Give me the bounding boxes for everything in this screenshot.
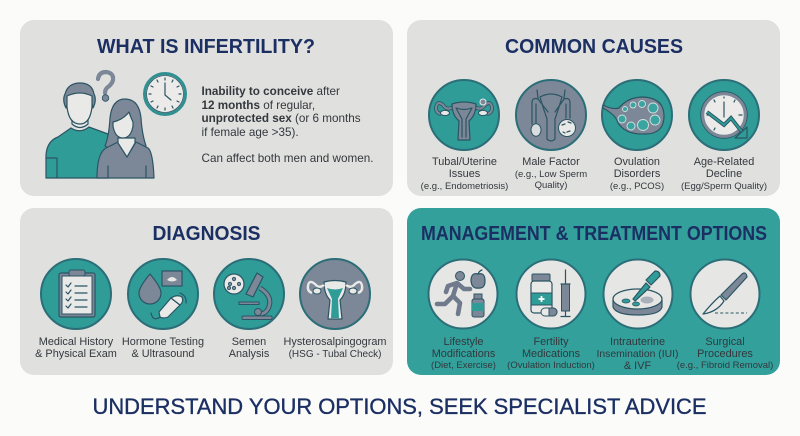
label: age-related decline: (Egg/Sperm Quality) [681,181,767,192]
text: who it affects: Can affect both men and women. [202,152,373,165]
label: hormone testing: & Ultrasound [132,348,194,360]
icon: clock with declining arrow [689,80,759,150]
label: IUI and IVF: & IVF [624,360,651,372]
panel: diagnosis [20,208,393,375]
label: IUI and IVF: Intrauterine [610,336,665,348]
panel: management and treatment options [407,208,780,375]
label: fertility medications: Fertility [533,336,569,348]
label: surgical procedures: (e.g., Fibroid Removal) [677,360,773,371]
icon: couple with question mark [46,72,154,178]
label: age-related decline: Decline [706,168,742,180]
label: lifestyle modifications: Modifications [432,348,496,360]
label: semen analysis: Analysis [229,348,270,360]
text: definition: Inability to conceive after [202,85,340,98]
label: hormone testing: Hormone Testing [122,336,204,348]
label: semen analysis: Semen [232,336,266,348]
label: male factor: Male Factor [522,156,580,168]
label: ovulation disorders: (e.g., PCOS) [610,181,664,192]
call to action: UNDERSTAND YOUR OPTIONS, SEEK SPECIALIST ADVICE [92,394,706,419]
heading: what is infertility: WHAT IS INFERTILITY? [97,35,315,58]
icon: clock [144,74,186,114]
label: tubal/uterine issues: Tubal/Uterine [432,156,497,168]
panel: common causes [407,20,780,196]
label: ovulation disorders: Disorders [614,168,661,180]
label: medical history: Medical History [39,336,114,348]
label: fertility medications: Medications [522,348,581,360]
panel: what is infertility: unprotected sex (or 6 months [202,112,361,125]
label: lifestyle modifications: (Diet, Exercise) [431,360,496,371]
heading: diagnosis: DIAGNOSIS [152,222,260,245]
label: surgical procedures: Surgical [705,336,745,348]
icon: clipboard checklist [41,259,111,329]
label: lifestyle modifications: Lifestyle [444,336,483,348]
label: hysterosalpingogram: Hysterosalpingogram [284,336,386,348]
label: surgical procedures: Procedures [697,348,753,360]
icon: blood drop and ultrasound [128,259,198,329]
icon: ovary with follicles [602,80,672,150]
icon: microscope and cells [214,259,284,329]
label: medical history: & Physical Exam [35,348,117,360]
icon: scalpel [690,260,760,328]
icon: male reproductive system [516,80,586,150]
label: tubal/uterine issues: (e.g., Endometriosis) [421,181,508,192]
icon: hysterosalpingogram uterus [300,259,370,329]
label: tubal/uterine issues: Issues [449,168,481,180]
label: male factor: Quality) [535,180,567,191]
icon: lifestyle runner, apple and bottle [428,260,498,328]
label: IUI and IVF: Insemination (IUI) [596,349,678,360]
icon: uterus [429,80,499,150]
panel: what is infertility [20,20,393,196]
label: ovulation disorders: Ovulation [614,156,660,168]
label: fertility medications: (Ovulation Induction) [507,360,595,371]
heading: common causes: COMMON CAUSES [505,35,683,58]
icon: medication bottle and syringe [516,260,586,328]
label: male factor: (e.g., Low Sperm [515,169,587,180]
icon: petri dish and pipette [604,260,672,328]
label: hysterosalpingogram: (HSG - Tubal Check) [289,349,381,360]
panel: what is infertility: 12 months of regular, [202,99,315,112]
label: age-related decline: Age-Related [694,156,754,168]
panel: what is infertility: if female age >35). [202,126,299,139]
